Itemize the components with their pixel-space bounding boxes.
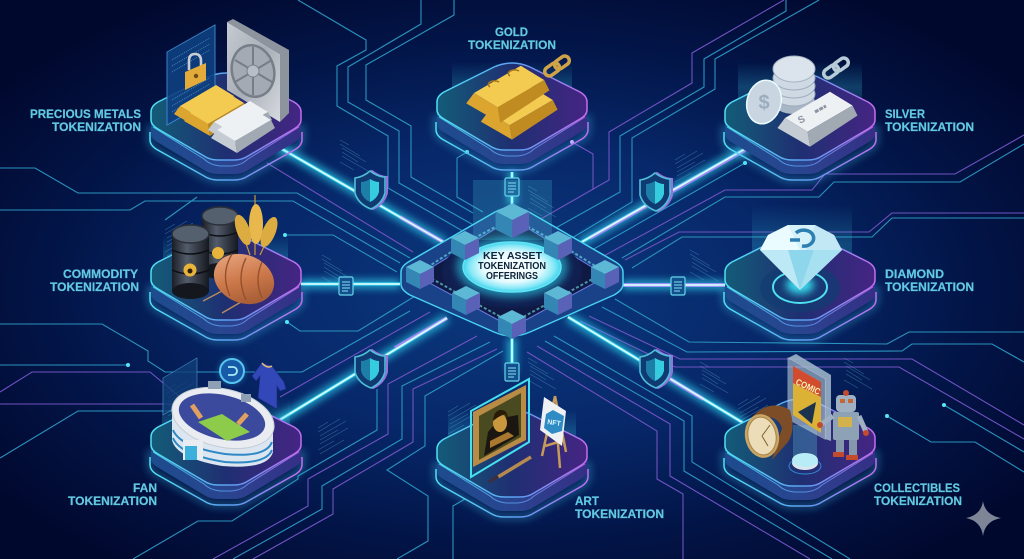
label xyxy=(30,107,141,134)
icon: silver coins xyxy=(742,56,815,127)
label xyxy=(885,107,974,134)
center oval label xyxy=(463,242,561,292)
label: TOKENIZATION xyxy=(885,120,974,134)
icon: toy robot xyxy=(817,390,869,460)
center oval label: KEY ASSET xyxy=(483,251,542,262)
icon: secure data screen xyxy=(167,25,215,125)
panel: art tokenization xyxy=(436,379,664,521)
label: GOLD xyxy=(495,25,528,39)
icon: sparkle watermark xyxy=(966,501,1001,536)
platform xyxy=(436,410,588,517)
label: TOKENIZATION xyxy=(468,38,556,52)
icon: wheat xyxy=(231,195,281,255)
icon: fan token coin xyxy=(217,356,247,386)
icon: gold bars xyxy=(466,66,558,140)
icon: silver coins: $ xyxy=(758,92,770,114)
connector beams xyxy=(273,145,752,424)
label xyxy=(68,481,157,508)
label: TOKENIZATION xyxy=(68,494,157,508)
platform xyxy=(150,73,302,180)
panel: collectibles tokenization xyxy=(724,354,962,508)
panel: fan tokenization xyxy=(68,356,302,508)
center oval label: TOKENIZATION xyxy=(478,261,546,272)
panel: gold tokenization xyxy=(436,25,588,170)
label: DIAMOND xyxy=(885,267,944,281)
label: COLLECTIBLES xyxy=(874,481,960,495)
icon: padlock xyxy=(185,54,206,90)
label: TOKENIZATION xyxy=(874,494,962,508)
platform xyxy=(150,233,302,340)
icon: gold chain xyxy=(543,54,571,78)
icon: comic book case xyxy=(788,354,831,441)
platform xyxy=(436,63,588,170)
platform xyxy=(724,399,876,506)
platform xyxy=(150,398,302,505)
panel: diamond tokenization xyxy=(724,205,974,340)
icon: copper coil xyxy=(203,245,282,313)
icon: comic book case: COMIC xyxy=(794,377,822,397)
icon: data panel xyxy=(163,358,197,415)
panel: silver tokenization xyxy=(724,56,974,180)
icon: jersey xyxy=(252,363,286,409)
label xyxy=(50,267,139,294)
glow ring xyxy=(760,264,840,312)
platform xyxy=(724,233,876,340)
code snippets xyxy=(165,140,872,454)
icon: pedestal xyxy=(789,425,821,474)
document icon: right xyxy=(671,277,685,295)
shield icon: top left xyxy=(355,171,387,209)
panel: precious metals tokenization xyxy=(30,19,302,180)
icon: silver bar: S xyxy=(796,114,808,127)
label: ART xyxy=(575,494,600,508)
icon: silver bars xyxy=(208,101,275,153)
shield icon: bottom left xyxy=(355,350,387,388)
label: TOKENIZATION xyxy=(885,280,974,294)
panel: central hub xyxy=(401,180,623,339)
label xyxy=(885,267,974,294)
icon: silver chain xyxy=(822,56,850,80)
label: COMMODITY xyxy=(63,267,138,281)
platform xyxy=(724,73,876,180)
center oval label: OFFERINGS xyxy=(486,271,538,282)
shield icon: bottom right xyxy=(640,350,672,388)
label xyxy=(575,494,664,521)
icon: wristwatch xyxy=(741,405,793,461)
panel: commodity tokenization xyxy=(50,195,302,340)
icon: oil barrels xyxy=(172,207,238,299)
document icon: left xyxy=(339,277,353,295)
label: FAN xyxy=(133,481,157,495)
icon: vault door xyxy=(226,19,289,122)
icon: stadium xyxy=(166,378,280,467)
label: TOKENIZATION xyxy=(52,120,141,134)
label: TOKENIZATION xyxy=(50,280,139,294)
label: PRECIOUS METALS xyxy=(30,107,141,121)
icon: paintbrush xyxy=(489,457,531,482)
label: TOKENIZATION xyxy=(575,507,664,521)
icon: diamond xyxy=(760,225,842,290)
label: SILVER xyxy=(885,107,925,121)
document icon: top xyxy=(505,178,519,196)
icon: NFT easel xyxy=(540,396,566,468)
icon: silver bar xyxy=(778,92,858,147)
label xyxy=(468,25,556,52)
document icon: bottom xyxy=(505,363,519,381)
icon: NFT easel: NFT xyxy=(547,419,562,428)
blockchain cubes xyxy=(406,203,619,339)
icon: gold bars xyxy=(174,85,248,136)
label xyxy=(874,481,962,508)
shield icon: top right xyxy=(640,173,672,211)
icon: framed painting xyxy=(471,379,529,477)
